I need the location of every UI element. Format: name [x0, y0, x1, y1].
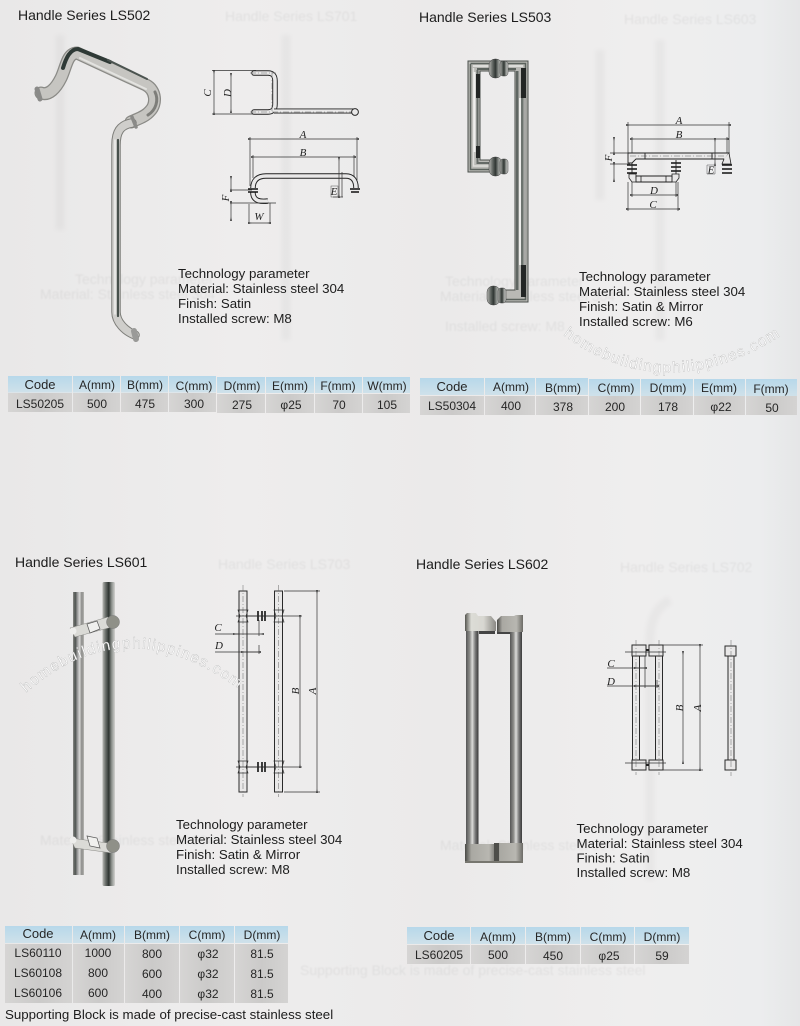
heading: LS503: Handle Series LS503: [419, 9, 552, 25]
panel: Handle Series LS502: [8, 7, 410, 413]
table: LS503 dimensions: E(mm): [701, 381, 737, 395]
table: LS502 dimensions: 70: [332, 398, 346, 412]
dimension drawing: LS502 side view: B: [300, 147, 307, 159]
handle photo: LS601 straight double bar handle: [70, 582, 120, 886]
faint show-through from reverse page: Material: Stainless steel 304: [40, 286, 215, 302]
text block: LS601 technology parameter: Technology parameter: [176, 817, 308, 832]
text block: LS503 technology parameter: Material: Stainless steel 304: [579, 284, 745, 299]
watermark: lower left: homebuildingphilippines.com: [20, 636, 242, 692]
table: LS601 dimensions: 600: [142, 967, 162, 981]
table: LS601 dimensions: φ32: [197, 947, 219, 961]
dimension drawing: LS502 side view: W: [254, 211, 264, 223]
dimension drawing: LS602: A: [692, 704, 704, 712]
table: LS502 dimensions: 275: [232, 398, 252, 412]
dimension drawing: LS503: [603, 115, 732, 211]
table: LS502 dimensions: C(mm): [176, 379, 212, 393]
dimension drawing: LS602: B: [674, 704, 686, 711]
table: LS601 dimensions: 800: [142, 947, 162, 961]
table: LS602 dimensions: D(mm): [644, 930, 680, 944]
table: LS503 dimensions: A(mm): [493, 380, 529, 394]
text block: LS601 technology parameter: Material: Stainless steel 304: [176, 832, 342, 847]
handle photo: LS602 double bar block handle: [465, 613, 523, 863]
dimension drawing: LS502 side view: F: [220, 194, 232, 202]
table: LS601 dimensions: D(mm): [244, 928, 280, 942]
footnote: supporting block: Supporting Block is made of precise-cast stainless steel: [5, 1007, 333, 1022]
table: LS602 dimensions: C(mm): [590, 930, 626, 944]
dimension drawing: LS502 side view: [220, 129, 360, 224]
faint show-through from reverse page: Technology parameter: [75, 271, 214, 287]
faint ghost shapes: [60, 35, 670, 880]
table: LS601 dimensions: 1000: [85, 946, 112, 960]
heading: LS502: Handle Series LS502: [18, 7, 151, 23]
table: LS502 dimensions: 105: [377, 398, 397, 412]
faint show-through from reverse page: Handle Series LS701: [225, 8, 358, 24]
handle photo: LS503 square handle: [468, 59, 528, 305]
dimension drawing: LS602: D: [606, 676, 615, 688]
table: LS503 dimensions: 378: [553, 400, 573, 414]
dimension drawing: LS503: C: [649, 199, 657, 211]
table: LS502 dimensions: 475: [135, 397, 155, 411]
table: LS503 dimensions: 50: [765, 401, 779, 415]
table: LS503 dimensions: 178: [658, 400, 678, 414]
table: LS502 dimensions: φ25: [280, 398, 302, 412]
table: LS503 dimensions: D(mm): [650, 381, 686, 395]
dimension drawing: LS503: A: [675, 115, 683, 127]
table: LS502 dimensions: F(mm): [320, 379, 356, 393]
panel: Handle Series LS503: [419, 9, 797, 415]
table: LS503 dimensions: B(mm): [545, 381, 581, 395]
dimension drawing: LS502 top view: [202, 70, 360, 115]
watermark: upper right: homebuildingphilippines.com: [564, 326, 780, 376]
text block: LS502 technology parameter: Finish: Satin: [178, 296, 251, 311]
dimension drawing: LS502 side view: E: [330, 186, 338, 198]
text block: LS502 technology parameter: Material: Stainless steel 304: [178, 281, 344, 296]
table: LS502 dimensions: W(mm): [367, 379, 407, 393]
table: LS601 dimensions: 81.5: [250, 967, 274, 981]
panel: Handle Series LS601: [5, 554, 342, 1022]
faint show-through from reverse page: Handle Series LS703: [218, 556, 351, 572]
table: LS602 dimensions: 59: [655, 949, 669, 963]
text block: LS502 technology parameter: Technology parameter: [178, 266, 310, 281]
dimension drawing: LS602: [606, 640, 736, 776]
table: LS601 dimensions: LS60106: [14, 986, 62, 1000]
text block: LS602 technology parameter: Finish: Satin: [576, 850, 650, 866]
table: LS601 dimensions: [5, 926, 288, 1003]
table: LS602 dimensions: A(mm): [480, 930, 516, 944]
faint show-through from reverse page: Handle Series LS702: [620, 559, 753, 575]
faint show-through from reverse page: Technology parameter: [445, 273, 584, 289]
table: LS601 dimensions: 600: [88, 986, 108, 1000]
dimension drawing: LS503: B: [676, 129, 683, 141]
table: LS601 dimensions: 400: [142, 987, 162, 1001]
table: LS601 dimensions: φ32: [197, 967, 219, 981]
table: LS502 dimensions: B(mm): [127, 378, 163, 392]
table: LS601 dimensions: 81.5: [250, 947, 274, 961]
table: LS602 dimensions: φ25: [598, 949, 620, 963]
table: LS601 dimensions: 800: [88, 966, 108, 980]
table: LS503 dimensions: F(mm): [753, 382, 789, 396]
dimension drawing: LS503: D: [649, 185, 658, 197]
table: LS601 dimensions: LS60108: [14, 966, 62, 980]
table: LS502 dimensions: LS50205: [16, 397, 64, 411]
table: LS503 dimensions: C(mm): [598, 381, 634, 395]
dimension drawing: LS601: D: [214, 640, 223, 652]
table: LS502 dimensions: E(mm): [272, 379, 308, 393]
dimension drawing: LS502 top view: C: [202, 89, 214, 97]
text block: LS601 technology parameter: Finish: Satin & Mirror: [176, 847, 301, 862]
table: LS503 dimensions: 200: [605, 400, 625, 414]
table: LS503 dimensions: 400: [501, 399, 521, 413]
table: LS502 dimensions: A(mm): [79, 378, 115, 392]
table: LS601 dimensions: Code: [22, 926, 54, 941]
heading: LS601: Handle Series LS601: [15, 554, 148, 570]
table: LS602 dimensions: Code: [423, 928, 455, 943]
table: LS601 dimensions: φ32: [197, 987, 219, 1001]
table: LS502 dimensions: Code: [24, 377, 56, 392]
table: LS602 dimensions: LS60205: [415, 948, 463, 962]
dimension drawing: LS601: C: [214, 622, 222, 634]
panel: Handle Series LS602: [407, 556, 743, 964]
dimension drawing: LS601: A: [307, 687, 319, 695]
table: LS502 dimensions: D(mm): [224, 379, 260, 393]
table: LS601 dimensions: B(mm): [134, 928, 170, 942]
table: LS503 dimensions: LS50304: [428, 399, 476, 413]
text block: LS602 technology parameter: Installed screw: M8: [576, 865, 690, 880]
dimension drawing: LS503: F: [603, 154, 615, 162]
table: LS601 dimensions: LS60110: [14, 946, 62, 960]
text block: LS503 technology parameter: Installed screw: M6: [579, 314, 693, 329]
dimension drawing: LS601: [214, 585, 320, 797]
dimension drawing: LS503: E: [707, 164, 715, 176]
table: LS503 dimensions: Code: [436, 379, 468, 394]
table: LS602 dimensions: 500: [488, 948, 508, 962]
table: LS503 dimensions: [420, 378, 797, 415]
text block: LS502 technology parameter: Installed screw: M8: [178, 311, 292, 326]
heading: LS602: Handle Series LS602: [416, 556, 549, 572]
faint show-through from reverse page: Handle Series LS603: [624, 11, 757, 27]
faint show-through from reverse page: Material: Stainless steel 304: [440, 837, 615, 853]
table: LS602 dimensions: 450: [543, 949, 563, 963]
table: LS602 dimensions: B(mm): [535, 930, 571, 944]
text block: LS602 technology parameter: Technology parameter: [576, 821, 709, 836]
faint show-through from reverse page: Material: Stainless steel 304: [40, 832, 215, 848]
table: LS502 dimensions: [8, 376, 410, 413]
text block: LS601 technology parameter: Installed screw: M8: [176, 862, 290, 877]
table: LS601 dimensions: C(mm): [189, 928, 225, 942]
table: LS601 dimensions: 81.5: [250, 987, 274, 1001]
faint show-through from reverse page: Supporting Block is made of precise-cast stainless steel: [300, 962, 646, 978]
dimension drawing: LS502 top view: D: [222, 89, 234, 98]
table: LS502 dimensions: 300: [184, 397, 204, 411]
handle photo: LS502 curved handle: [37, 49, 157, 339]
table: LS503 dimensions: φ22: [710, 400, 732, 414]
text block: LS503 technology parameter: Technology parameter: [579, 269, 711, 284]
table: LS601 dimensions: A(mm): [80, 928, 116, 942]
text block: LS602 technology parameter: Material: Stainless steel 304: [576, 836, 743, 851]
faint show-through from reverse page: Installed screw: M8: [445, 318, 565, 334]
faint show-through from reverse page: Material: Stainless steel 304: [440, 288, 615, 304]
dimension drawing: LS601: B: [290, 687, 302, 694]
dimension drawing: LS602: C: [607, 658, 615, 670]
table: LS502 dimensions: 500: [87, 397, 107, 411]
dimension drawing: LS502 side view: A: [299, 129, 307, 141]
text block: LS503 technology parameter: Finish: Satin & Mirror: [579, 299, 704, 314]
table: LS602 dimensions: [407, 927, 689, 964]
